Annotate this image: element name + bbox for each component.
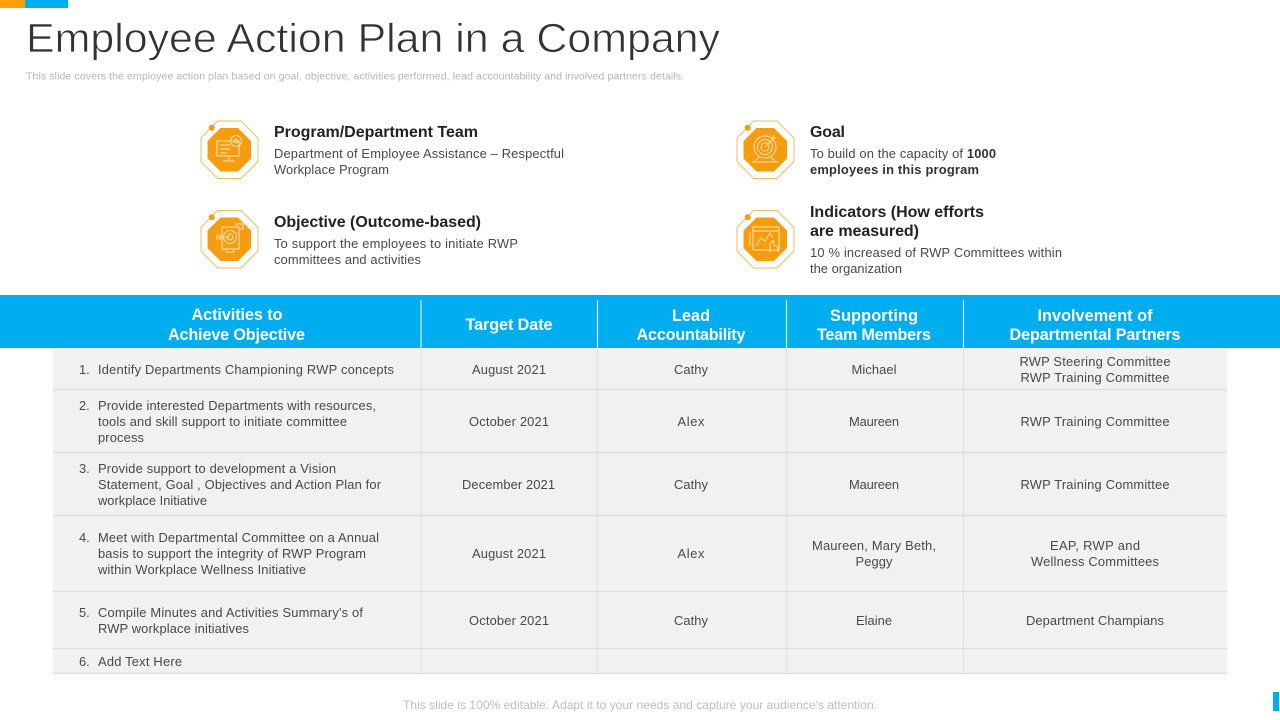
row 1: Identify Departments Championing RWP concepts xyxy=(98,362,394,377)
text: goal: To build on the capacity of 1000 xyxy=(810,146,996,161)
text: program department team xyxy=(274,146,564,177)
heading: indicators xyxy=(810,204,984,240)
text: objective: committees and activities xyxy=(274,252,421,267)
row 4 xyxy=(79,530,1159,577)
row 5: Cathy xyxy=(674,613,709,628)
text: program department team: Department of Employee Assistance – Respectful xyxy=(274,146,564,161)
table header: Lead xyxy=(672,307,710,325)
icon: target on screen xyxy=(201,210,258,268)
row 3: December 2021 xyxy=(462,477,555,492)
row 3: workplace Initiative xyxy=(97,493,207,508)
icon: chart with hand xyxy=(737,210,794,268)
text: indicators: the organization xyxy=(810,261,902,276)
row 2: October 2021 xyxy=(469,414,549,429)
row 4: basis to support the integrity of RWP Program xyxy=(98,546,366,561)
panel: indicators xyxy=(737,204,1062,276)
table header: Target Date xyxy=(466,316,552,334)
row 4: Alex xyxy=(678,546,705,561)
row 3 xyxy=(79,461,1170,508)
table header: Departmental Partners xyxy=(1010,326,1180,344)
row 1: Cathy xyxy=(674,362,709,377)
row 3: Statement, Goal , Objectives and Action Plan for xyxy=(98,477,382,492)
row 1: August 2021 xyxy=(472,362,546,377)
row 3: 3. xyxy=(79,461,90,476)
text: objective xyxy=(274,236,518,267)
row 2: tools and skill support to initiate committee xyxy=(98,414,347,429)
table header: Accountability xyxy=(636,326,746,344)
row 4: 4. xyxy=(79,530,90,545)
table header xyxy=(0,295,1280,348)
row 2: Alex xyxy=(678,414,705,429)
row 5: October 2021 xyxy=(469,613,549,628)
table header: Achieve Objective xyxy=(168,326,305,344)
row 4: Wellness Committees xyxy=(1031,554,1159,569)
row 5: Elaine xyxy=(856,613,892,628)
row 6: Add Text Here xyxy=(98,654,182,669)
top accent bars xyxy=(0,0,68,8)
row 3: RWP Training Committee xyxy=(1020,477,1170,492)
row 1: 1. xyxy=(79,362,90,377)
text: goal xyxy=(810,146,996,177)
row 5 xyxy=(79,605,1164,636)
row 1 xyxy=(79,354,1170,385)
row 1: RWP Training Committee xyxy=(1020,370,1170,385)
panel: program department team xyxy=(201,121,564,178)
icon: monitor with gear xyxy=(201,121,258,178)
row 2: process xyxy=(98,430,144,445)
table header: Activities to xyxy=(192,306,283,324)
row 4: Peggy xyxy=(856,554,893,569)
row 2 xyxy=(79,398,1170,445)
row 6: 6. xyxy=(79,654,90,669)
row 2: 2. xyxy=(79,398,90,413)
row 2: RWP Training Committee xyxy=(1020,414,1170,429)
row 4: EAP, RWP and xyxy=(1050,538,1140,553)
table header: Supporting xyxy=(830,307,918,325)
heading: goal: Goal xyxy=(810,124,845,141)
title: Employee Action Plan in a Company xyxy=(26,15,721,61)
row 2: Provide interested Departments with resources, xyxy=(98,398,376,413)
text: objective: To support the employees to initiate RWP xyxy=(274,236,518,251)
row 5: 5. xyxy=(79,605,90,620)
heading: indicators: are measured) xyxy=(810,223,919,240)
table header: Involvement of xyxy=(1038,307,1153,325)
panel: goal xyxy=(737,121,996,178)
row 1: Michael xyxy=(852,362,896,377)
row 5: Department Champians xyxy=(1026,613,1164,628)
text: goal: employees in this program xyxy=(810,162,979,177)
row 3: Provide support to development a Vision xyxy=(98,461,336,476)
heading: program department team: Program/Department Team xyxy=(274,124,478,141)
row 4: Maureen, Mary Beth, xyxy=(812,538,936,553)
row 4: August 2021 xyxy=(472,546,546,561)
panel: objective xyxy=(201,210,518,268)
table header: Team Members xyxy=(817,326,931,344)
row 4: within Workplace Wellness Initiative xyxy=(97,562,306,577)
row 2: Maureen xyxy=(849,414,899,429)
table: action plan xyxy=(0,295,1280,674)
row 4: Meet with Departmental Committee on a Annual xyxy=(98,530,379,545)
corner accent xyxy=(1273,692,1279,711)
heading: objective: Objective (Outcome-based) xyxy=(274,214,481,231)
text: program department team: Workplace Program xyxy=(274,162,389,177)
row 3: Cathy xyxy=(674,477,709,492)
row 5: RWP workplace initiatives xyxy=(98,621,249,636)
row 3: Maureen xyxy=(849,477,899,492)
text: indicators xyxy=(810,245,1062,276)
text: indicators: 10 % increased of RWP Committees within xyxy=(810,245,1062,260)
footer note: This slide is 100% editable. Adapt it to your needs and capture your audience's attention. xyxy=(403,698,877,712)
heading: indicators: Indicators (How efforts xyxy=(810,204,984,221)
row 1: RWP Steering Committee xyxy=(1020,354,1170,369)
subtitle: This slide covers the employee action plan based on goal, objective, activities performed, lead accountability and involved partners details. xyxy=(26,70,684,82)
icon: radar target xyxy=(737,121,794,178)
row 5: Compile Minutes and Activities Summary's of xyxy=(98,605,363,620)
table body background xyxy=(53,348,1227,674)
